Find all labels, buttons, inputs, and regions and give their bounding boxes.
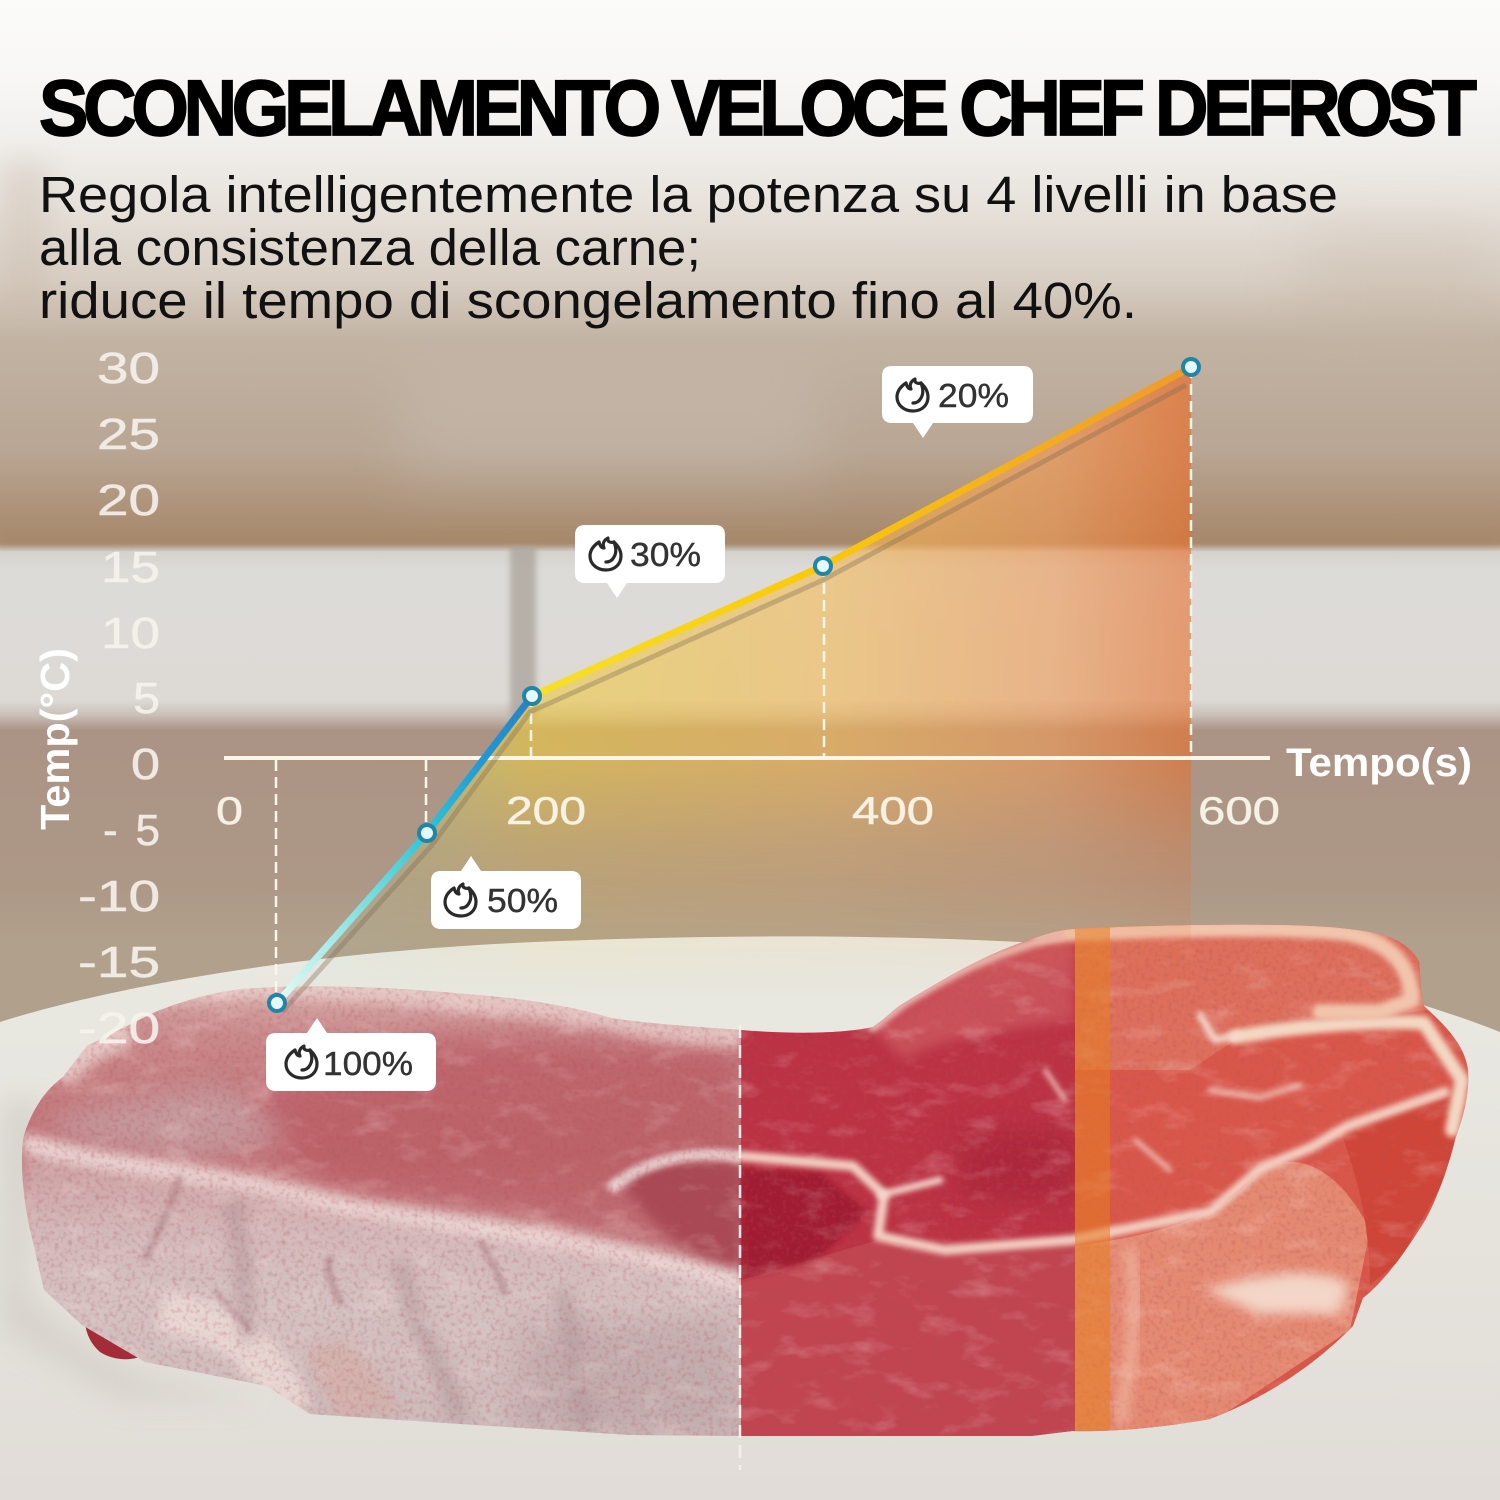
subtitle text block: Regola intelligentemente la potenza su 4 livelli in base	[39, 166, 1338, 223]
x axis values	[216, 790, 1280, 833]
curve points	[269, 359, 1199, 1011]
y axis values: -20	[78, 1004, 160, 1053]
steak: half frozen, half defrosted	[0, 920, 1500, 1450]
y axis values: -10	[78, 872, 160, 921]
callout: 30%: 30%	[630, 536, 701, 573]
curve	[277, 367, 1191, 1003]
x axis values: 400	[852, 790, 934, 833]
y axis title: Temp(°C)	[32, 648, 78, 830]
y axis values: 10	[101, 609, 160, 658]
y axis values: 25	[97, 410, 160, 459]
chart: defrost curve	[32, 344, 1472, 1091]
curve shadow	[282, 385, 1186, 1012]
thawed right half	[1075, 924, 1468, 1432]
callout: 50%	[431, 856, 581, 929]
title: SCONGELAMENTO VELOCE CHEF DEFROST	[39, 65, 1477, 152]
callout: 50%: 50%	[487, 882, 558, 919]
callout: 100%	[266, 1018, 436, 1091]
fat seams right	[741, 929, 1462, 1420]
plate	[0, 936, 1500, 1500]
subtitle text block: riduce il tempo di scongelamento fino al 40%.	[39, 272, 1137, 329]
frozen side creases	[145, 1175, 505, 1330]
defrosted centre	[741, 920, 1075, 1450]
icon: dark red meat lump under steak	[85, 1322, 150, 1359]
y axis values: 20	[97, 476, 160, 525]
frozen left half	[22, 986, 741, 1436]
y axis values: 5	[133, 674, 160, 723]
y axis values	[78, 344, 160, 1053]
dashed drop lines	[276, 367, 1191, 1003]
y axis values: 0	[131, 740, 160, 789]
chart area fill	[358, 374, 1191, 970]
x axis title: Tempo(s)	[1286, 741, 1472, 785]
orange band overlay	[1075, 920, 1110, 1450]
dashed divider across steak	[739, 1025, 741, 1470]
callout: 20%	[882, 366, 1033, 438]
y axis values: 30	[97, 344, 160, 393]
background: blurred kitchen	[0, 0, 1500, 1100]
x axis line	[224, 756, 1270, 760]
x axis values: 600	[1198, 790, 1280, 833]
subtitle text block	[39, 166, 1338, 329]
y axis values: 15	[101, 543, 160, 592]
subtitle text block: alla consistenza della carne;	[39, 219, 701, 276]
y axis values: -15	[78, 938, 160, 987]
callout: 30%	[575, 525, 725, 598]
red top surface of frozen half	[228, 1040, 741, 1272]
x axis values: 200	[506, 790, 586, 833]
marbling texture	[22, 939, 1462, 1436]
callout: 20%: 20%	[938, 377, 1009, 414]
pale side	[20, 1140, 741, 1440]
callout: 100%: 100%	[323, 1045, 413, 1082]
y axis values: - 5	[103, 806, 160, 855]
x axis values: 0	[216, 790, 243, 833]
